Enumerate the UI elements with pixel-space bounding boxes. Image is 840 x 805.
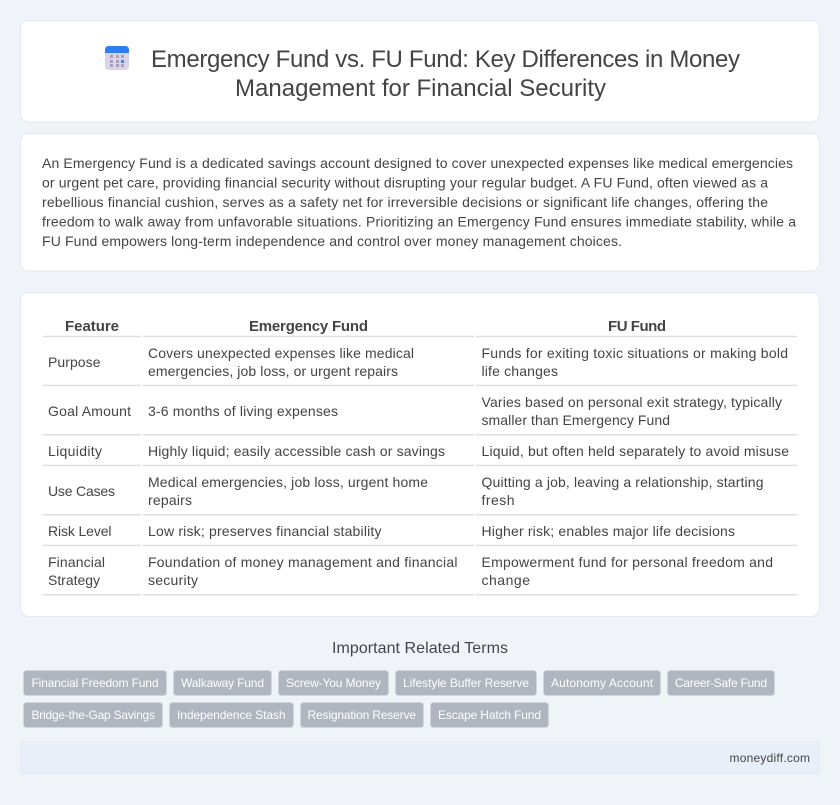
row: financial strategy: Empowerment fund for personal freedom and bbox=[482, 554, 773, 570]
intro paragraph: or urgent pet care, providing financial security without disrupting your regular budget. A FU Fund, often viewed as a bbox=[42, 174, 768, 190]
row: risk level bbox=[48, 523, 735, 539]
row: use cases: fresh bbox=[482, 492, 514, 508]
related term tags: Walkaway Fund bbox=[181, 676, 264, 690]
row: liquidity: Liquidity bbox=[48, 443, 102, 459]
row: goal amount: 3-6 months of living expenses bbox=[148, 403, 338, 419]
row: use cases: repairs bbox=[148, 492, 192, 508]
row: use cases: Medical emergencies, job loss, urgent home bbox=[148, 474, 428, 490]
row: goal amount: smaller than Emergency Fund bbox=[482, 412, 670, 428]
row: liquidity: Highly liquid; easily accessible cash or savings bbox=[148, 443, 445, 459]
row: use cases: Use Cases bbox=[48, 483, 115, 499]
row: financial strategy: Foundation of money management and financial bbox=[148, 554, 458, 570]
row: financial strategy: Strategy bbox=[48, 572, 100, 588]
row: purpose: emergencies, job loss, or urgent repairs bbox=[148, 363, 398, 379]
table header row: Feature bbox=[65, 318, 119, 335]
row: financial strategy: security bbox=[148, 572, 198, 588]
related term tags: Career-Safe Fund bbox=[675, 676, 767, 690]
intro paragraph: FU Fund empowers long-term independence and control over money management choices. bbox=[42, 233, 622, 249]
row: purpose: Funds for exiting toxic situations or making bold bbox=[482, 345, 788, 361]
footer bar bbox=[20, 741, 820, 775]
comparison table panel bbox=[20, 292, 820, 616]
intro paragraph: freedom to walk away from unfavorable situations. Prioritizing an Emergency Fund ensures immediate stability, while a bbox=[42, 214, 796, 230]
row: liquidity: Liquid, but often held separately to avoid misuse bbox=[482, 443, 789, 459]
related term tags: Resignation Reserve bbox=[308, 708, 416, 722]
related term tags: Escape Hatch Fund bbox=[438, 708, 541, 722]
row: use cases: Quitting a job, leaving a relationship, starting bbox=[482, 474, 764, 490]
footer bar: moneydiff.com bbox=[730, 751, 810, 765]
row: use cases bbox=[48, 474, 764, 508]
related term tags: Financial Freedom Fund bbox=[32, 676, 158, 690]
related term tags: Screw-You Money bbox=[286, 676, 381, 690]
table header row bbox=[65, 318, 666, 335]
related term tags: Independence Stash bbox=[177, 708, 286, 722]
row: goal amount: Varies based on personal exit strategy, typically bbox=[482, 394, 782, 410]
intro paragraph: An Emergency Fund is a dedicated savings account designed to cover unexpected expenses like medical emergencies bbox=[42, 155, 793, 171]
related term tags: Bridge-the-Gap Savings bbox=[32, 708, 155, 722]
related term tags bbox=[24, 670, 774, 728]
row: risk level: Risk Level bbox=[48, 523, 112, 539]
row: risk level: Low risk; preserves financial stability bbox=[148, 523, 382, 539]
row: liquidity bbox=[48, 443, 789, 459]
row: purpose bbox=[48, 345, 788, 379]
related term tags: Autonomy Account bbox=[551, 676, 654, 690]
row: goal amount: Goal Amount bbox=[48, 403, 131, 419]
row: purpose: Covers unexpected expenses like medical bbox=[148, 345, 414, 361]
title: Emergency Fund vs. FU Fund: Key Differences in Money bbox=[151, 46, 740, 73]
intro panel bbox=[20, 134, 820, 271]
row: purpose: Purpose bbox=[48, 354, 101, 370]
intro paragraph: rebellious financial cushion, serves as a safety net for irreversible decisions or significant life changes, offering the bbox=[42, 194, 768, 210]
table header row: Emergency Fund bbox=[249, 318, 368, 335]
header panel bbox=[20, 20, 820, 122]
icon: calendar bbox=[105, 46, 129, 70]
related term tags: Lifestyle Buffer Reserve bbox=[403, 676, 529, 690]
row: financial strategy: Financial bbox=[48, 554, 105, 570]
title bbox=[151, 46, 740, 102]
row: financial strategy: change bbox=[482, 572, 530, 588]
row: goal amount bbox=[48, 394, 782, 428]
row: risk level: Higher risk; enables major life decisions bbox=[482, 523, 735, 539]
row: financial strategy bbox=[48, 554, 773, 588]
title: Management for Financial Security bbox=[235, 75, 606, 102]
table header row: FU Fund bbox=[608, 318, 666, 335]
row: purpose: life changes bbox=[482, 363, 558, 379]
intro paragraph bbox=[42, 155, 796, 249]
related terms heading: Important Related Terms bbox=[332, 640, 508, 657]
